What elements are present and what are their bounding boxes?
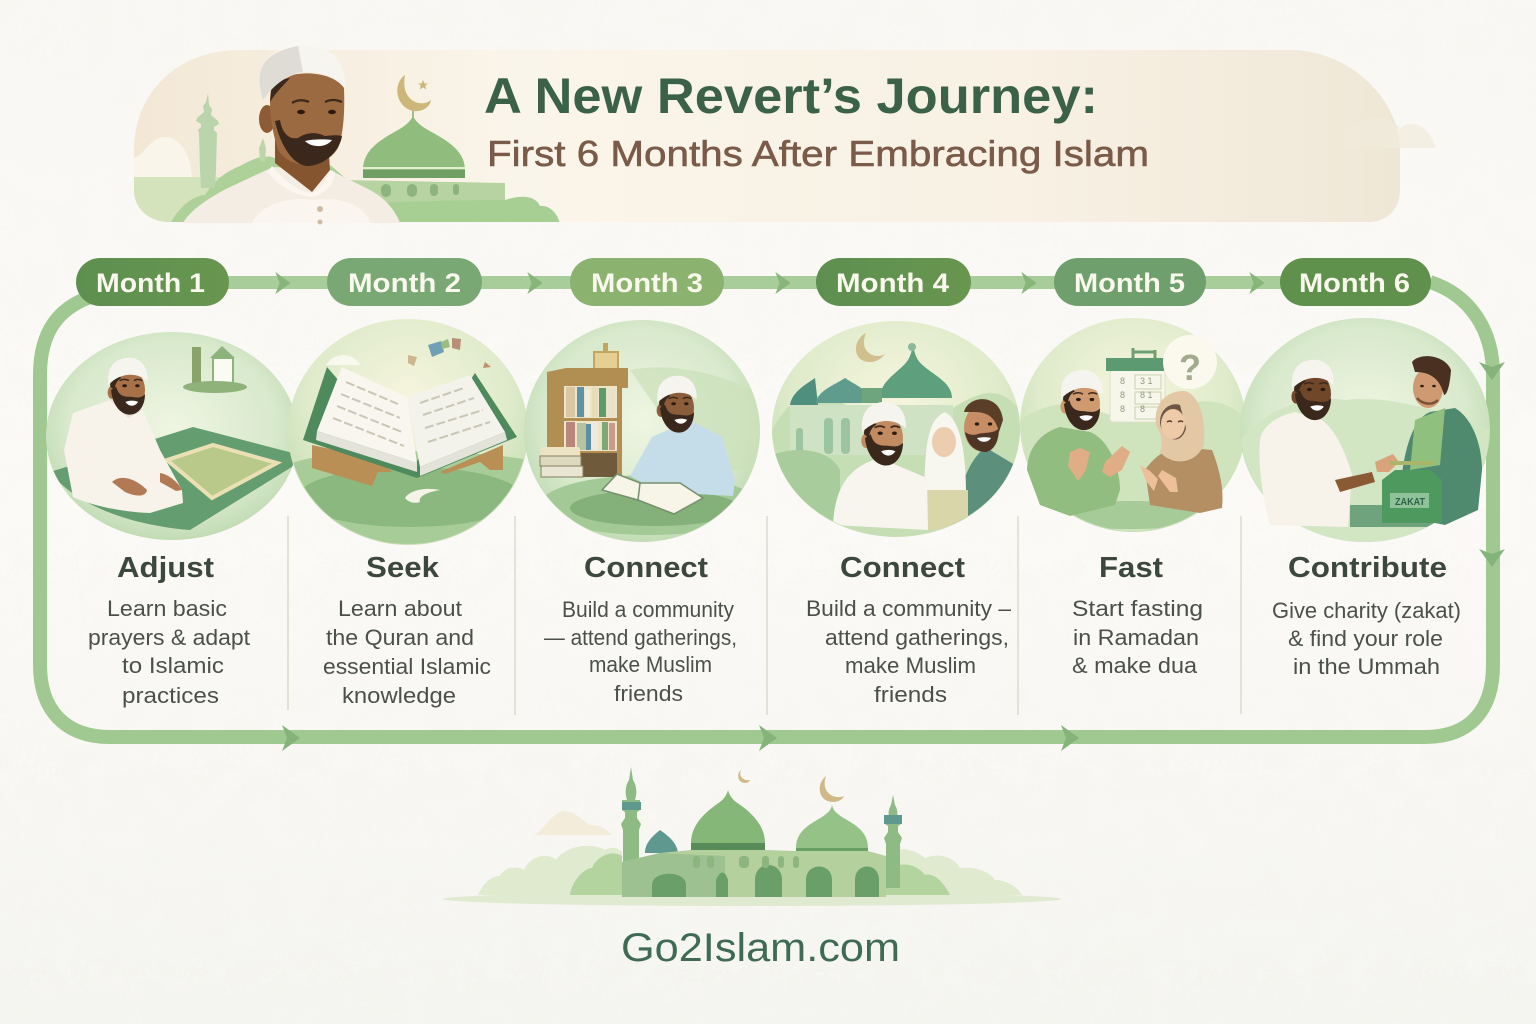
title: A New Revert’s Journey:: [484, 68, 1098, 124]
body text: attend gatherings,: [825, 625, 1009, 650]
illustration: month 6 zakat: [1240, 318, 1490, 545]
domes: [645, 830, 678, 853]
body text: make Muslim: [845, 653, 976, 678]
subtitle: First 6 Months After Embracing Islam: [487, 133, 1149, 174]
step: Adjust: [88, 552, 251, 708]
calendar: 3 1: [1140, 376, 1153, 386]
man giving: [1259, 360, 1375, 527]
step: Contribute: [1272, 552, 1461, 679]
body text: [1072, 596, 1203, 678]
man receiving: [1375, 356, 1482, 525]
pill: Month 1: Month 1: [96, 268, 205, 298]
banner cloud: [1340, 118, 1436, 148]
mosque: [790, 343, 953, 455]
illustration: month 1 prayer: [46, 332, 308, 540]
calendar: 8: [1140, 404, 1145, 414]
pill: Month 3: [570, 258, 724, 306]
body text: [88, 596, 251, 708]
body text: prayers & adapt: [88, 625, 251, 650]
icon: crescent and star: [397, 75, 431, 111]
portrait of man: [183, 45, 400, 224]
step: Contribute: Contribute: [1288, 552, 1447, 584]
pill: Month 5: [1054, 258, 1206, 306]
pill: Month 2: [327, 258, 482, 306]
calendar: 8: [1120, 404, 1125, 414]
step: Connect month 3: [544, 552, 737, 706]
pill: Month 3: Month 3: [591, 268, 703, 298]
zakat box: ZAKAT: [1395, 497, 1425, 508]
crescents: [738, 770, 844, 802]
body text: [806, 596, 1011, 707]
ground: [288, 451, 528, 550]
floating shapes: [326, 338, 491, 368]
step: Fast: [1072, 552, 1203, 678]
body text: Learn basic: [107, 596, 227, 621]
body text: friends: [614, 681, 683, 706]
body text: make Muslim: [589, 652, 712, 677]
calendar: 8 1: [1140, 390, 1153, 400]
pill: Month 6: [1280, 258, 1431, 306]
kneeling man: [64, 358, 183, 513]
step: Connect month 4: [806, 552, 1011, 707]
month connectors: [225, 272, 1284, 294]
banner scenery: [134, 93, 560, 227]
illustration: month 3 study: [524, 320, 770, 542]
step: Adjust: Adjust: [117, 552, 214, 584]
body text: [544, 597, 737, 706]
question bubble: [1163, 335, 1217, 389]
illustration: month 2 Quran: [288, 319, 528, 550]
woman making dua: [1140, 391, 1223, 513]
body text: practices: [122, 683, 219, 708]
body text: — attend gatherings,: [544, 625, 737, 650]
body text: knowledge: [342, 683, 456, 708]
body text: & make dua: [1072, 653, 1197, 678]
body text: in the Ummah: [1293, 654, 1440, 679]
body text: Give charity (zakat): [1272, 598, 1461, 623]
body text: the Quran and: [326, 625, 474, 650]
body text: to Islamic: [122, 653, 224, 678]
body text: Start fasting: [1072, 596, 1203, 621]
pill: Month 1: [76, 258, 229, 306]
footer website text: Go2Islam.com: [621, 926, 900, 970]
question bubble: ?: [1179, 347, 1201, 388]
pill: Month 6: Month 6: [1299, 268, 1410, 298]
pill: Month 4: [816, 258, 971, 306]
calendar: 8: [1120, 376, 1125, 386]
zakat box: [1382, 461, 1442, 523]
pill: Month 5: Month 5: [1074, 268, 1185, 298]
step: Connect month 4: Connect: [840, 552, 965, 584]
body text: & find your role: [1288, 626, 1443, 651]
calendar: 8: [1120, 390, 1125, 400]
header banner: [134, 45, 1436, 227]
body text: Learn about: [338, 596, 463, 621]
reading man: [602, 376, 735, 514]
man making dua: [1027, 370, 1130, 516]
footer mosque illustration: [443, 767, 1061, 906]
step: Seek: [323, 552, 491, 708]
illustration: month 4 community: [772, 321, 1020, 540]
illustration: month 5 fasting and dua: [1020, 318, 1246, 540]
body text: essential Islamic: [323, 654, 491, 679]
step: Seek: Seek: [366, 552, 440, 584]
prayer rug: [50, 427, 308, 530]
body text: [323, 596, 491, 708]
step: Fast: Fast: [1099, 552, 1163, 584]
calendar: [1106, 348, 1165, 422]
step: Connect month 3: Connect: [584, 552, 708, 584]
cloud: [535, 811, 612, 835]
community group: [833, 399, 1015, 535]
building: [622, 850, 886, 897]
column dividers: [288, 516, 1241, 715]
bushes: [478, 846, 1022, 895]
body text: [1272, 598, 1461, 679]
body text: friends: [874, 682, 947, 707]
body text: Build a community –: [806, 596, 1011, 621]
body text: in Ramadan: [1073, 625, 1199, 650]
open book: [303, 367, 517, 478]
pill: Month 2: Month 2: [348, 268, 461, 298]
mini mosque: [183, 346, 247, 393]
bookshelf and lantern: [540, 343, 628, 477]
crescent: [856, 333, 885, 362]
pill: Month 4: Month 4: [836, 268, 949, 298]
minarets: [621, 767, 902, 888]
journey loop arrow: [40, 282, 1505, 751]
book stand: [312, 445, 503, 486]
body text: Build a community: [562, 597, 735, 622]
